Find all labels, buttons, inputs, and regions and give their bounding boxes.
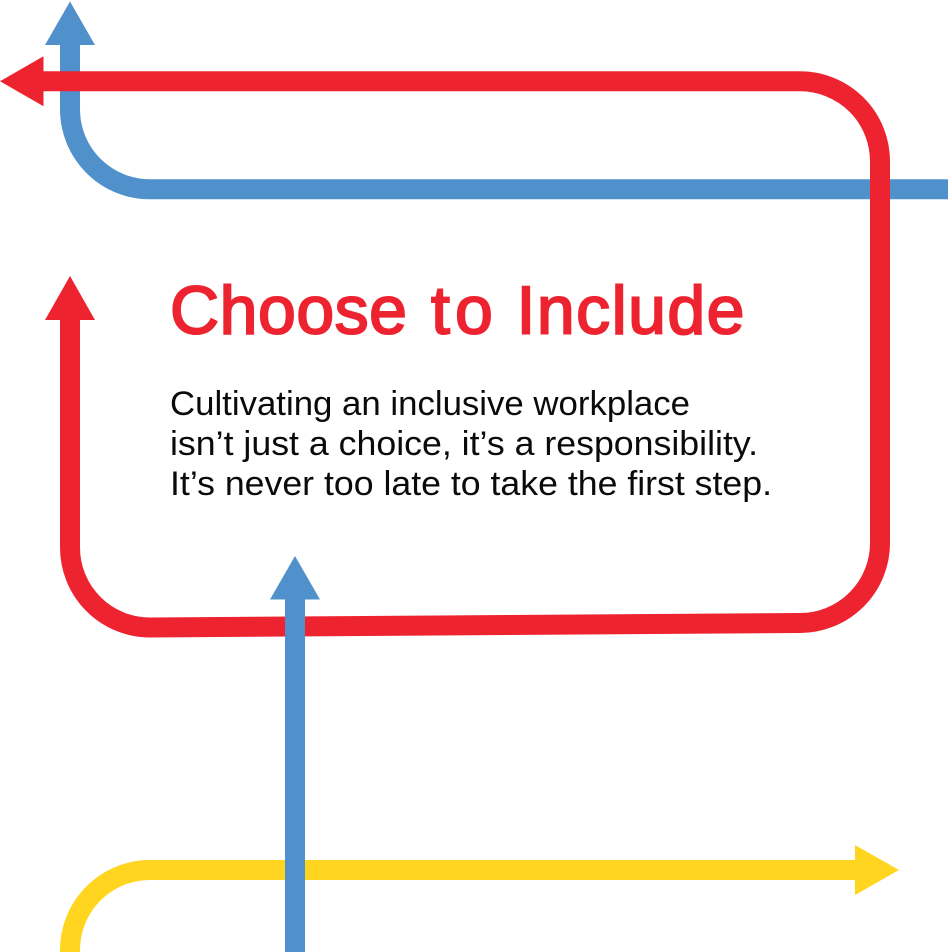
arrow: blue vertical line bbox=[270, 556, 320, 952]
arrow: red loop line bbox=[0, 56, 880, 628]
title bbox=[170, 272, 744, 348]
text block: body copy: Cultivating an inclusive workplace bbox=[170, 385, 690, 423]
text block: body copy bbox=[170, 385, 772, 503]
text block: body copy: It’s never too late to take the first step. bbox=[170, 465, 772, 503]
title: Choose bbox=[170, 272, 407, 348]
arrow: blue top line bbox=[45, 2, 948, 189]
arrow: yellow line bbox=[70, 845, 899, 952]
title: Include bbox=[516, 272, 744, 348]
title: to bbox=[431, 272, 493, 348]
text block: body copy: isn’t just a choice, it’s a responsibility. bbox=[170, 425, 758, 463]
